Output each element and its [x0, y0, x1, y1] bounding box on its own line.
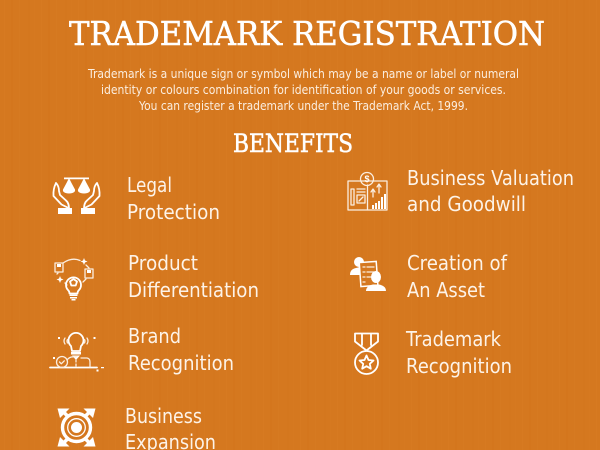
label: product differentiation: Product [128, 251, 198, 275]
label: creation of an asset: An Asset [407, 278, 485, 302]
label: business valuation and goodwill: and Goodwill [407, 192, 526, 216]
label: creation of an asset [407, 251, 508, 302]
benefit: creation of an asset [350, 251, 508, 302]
benefit: business valuation and goodwill [348, 166, 574, 216]
benefit: brand recognition [50, 324, 234, 375]
label: brand recognition [128, 324, 234, 375]
label: legal protection [127, 173, 220, 224]
label: trademark recognition [405, 327, 512, 378]
icon: idea bulb over desk with check [50, 333, 104, 372]
label: business valuation and goodwill: Business Valuation [407, 166, 574, 190]
label: brand recognition: Recognition [128, 351, 234, 375]
icon: bulb with boxes and sparkles [55, 258, 93, 300]
icon: open book with dollar and growth chart [348, 172, 387, 210]
benefit: legal protection [53, 173, 220, 224]
label: legal protection: Legal [127, 173, 172, 197]
benefit: trademark recognition [355, 327, 512, 378]
benefit: product differentiation [55, 251, 259, 302]
label: trademark recognition: Recognition [406, 354, 512, 378]
label: business expansion [125, 404, 216, 450]
label: brand recognition: Brand [128, 324, 181, 348]
label: legal protection: Protection [127, 200, 220, 224]
label: business valuation and goodwill [407, 166, 574, 216]
icon: people with checklist [350, 257, 386, 291]
title: TRADEMARK REGISTRATION [69, 14, 545, 53]
intro text block: identity or colours combination for identification of your goods or services. [101, 83, 506, 97]
intro text block: You can register a trademark under the Trademark Act, 1999. [138, 99, 468, 113]
label: business expansion: Business [125, 404, 202, 428]
intro text block [87, 67, 519, 113]
icon: open book with dollar and growth chart: $ [364, 174, 370, 184]
icon: hands holding scales [53, 178, 100, 214]
icon: target with outward arrows [58, 408, 96, 446]
intro text block: Trademark is a unique sign or symbol which may be a name or label or numeral [87, 67, 519, 81]
label: creation of an asset: Creation of [407, 251, 508, 275]
label: product differentiation [128, 251, 259, 302]
icon: medal with star [355, 334, 378, 374]
benefits heading: BENEFITS [233, 129, 353, 158]
label: trademark recognition: Trademark [405, 327, 501, 351]
benefit: business expansion [58, 404, 216, 450]
label: product differentiation: Differentiation [128, 278, 259, 302]
